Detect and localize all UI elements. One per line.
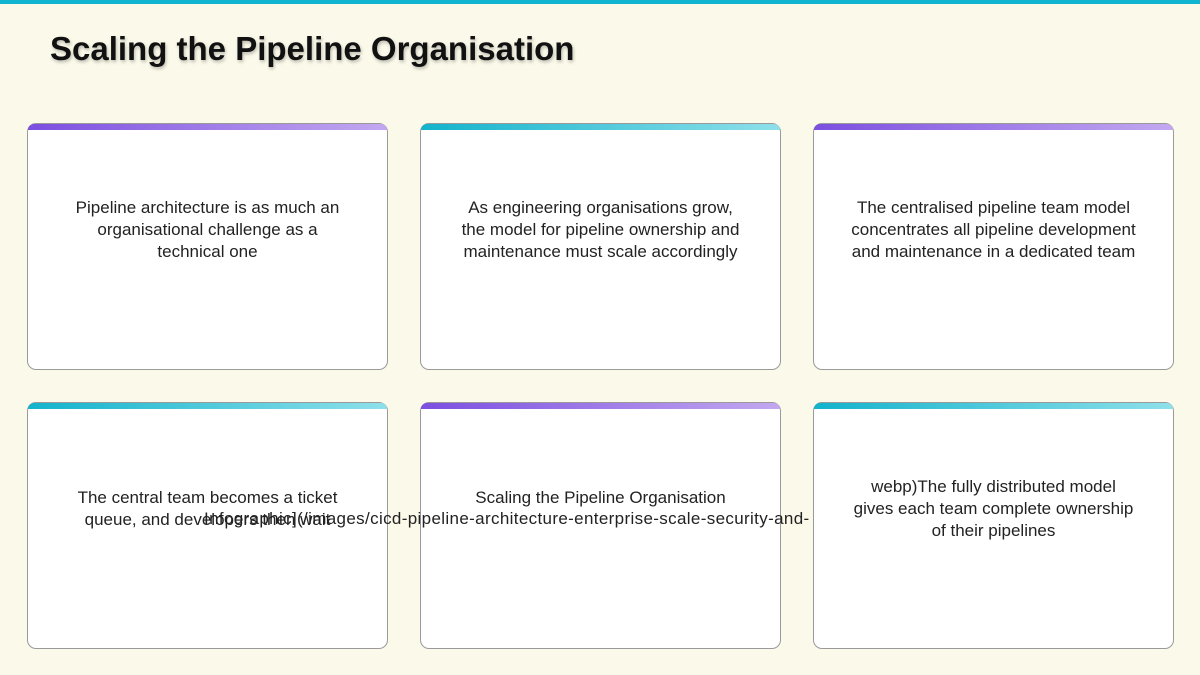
card 2 bbox=[420, 123, 781, 370]
card 5 bbox=[420, 402, 781, 649]
overflow text: Infographic](/images/cicd-pipeline-architecture-enterprise-scale-security-and- bbox=[204, 509, 810, 528]
card 6: gives each team complete ownership bbox=[854, 498, 1133, 518]
card 6 bbox=[813, 402, 1174, 649]
card 1 bbox=[27, 123, 388, 370]
card 4: The central team becomes a ticket queue, and developers then wait bbox=[78, 488, 337, 528]
title: Scaling the Pipeline Organisation bbox=[50, 30, 574, 67]
card 3: The centralised pipeline team model concentrates all pipeline development and maintenance in a dedicated team bbox=[851, 198, 1136, 260]
card 5: Scaling the Pipeline Organisation bbox=[475, 488, 726, 506]
card 6: webp)The fully distributed model bbox=[871, 476, 1116, 496]
card 3 bbox=[813, 123, 1174, 370]
card 1: Pipeline architecture is as much an organisational challenge as a technical one bbox=[76, 198, 339, 260]
card 6: of their pipelines bbox=[932, 520, 1055, 540]
card 4 bbox=[27, 402, 388, 649]
card 2: As engineering organisations grow, the model for pipeline ownership and maintenance must scale accordingly bbox=[462, 198, 739, 260]
